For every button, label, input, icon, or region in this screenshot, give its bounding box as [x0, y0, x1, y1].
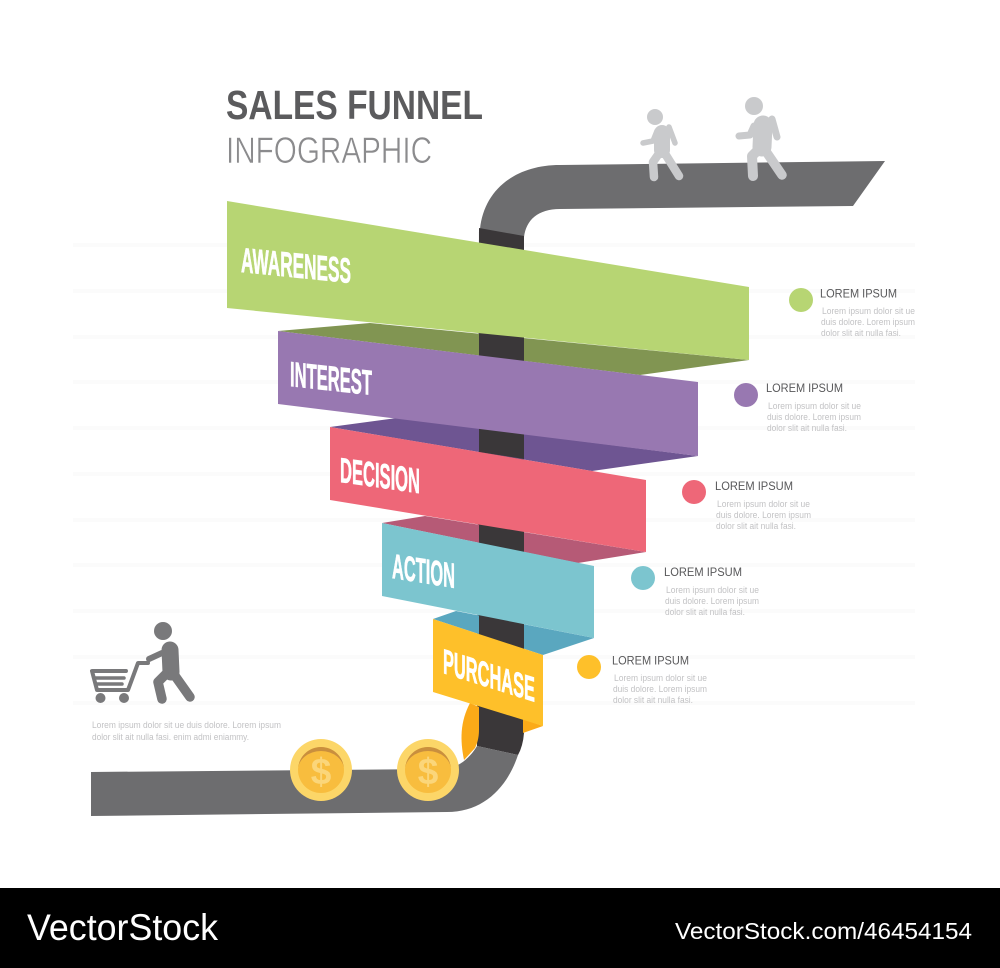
callout: decision: duis dolore. Lorem ipsum — [716, 510, 811, 520]
icon: coin right: $ — [418, 751, 439, 792]
panel: decision ribbon — [330, 427, 646, 552]
strip over awareness shade — [479, 330, 524, 363]
strip over action shade — [479, 615, 524, 650]
panel: action ribbon: ACTION — [392, 547, 455, 596]
panel: decision ribbon: DECISION — [340, 451, 420, 501]
callout: action — [631, 565, 759, 617]
callout: purchase: dolor slit ait nulla fasi. — [613, 695, 693, 705]
strip over interest shade — [479, 425, 524, 459]
panel: interest ribbon — [278, 331, 698, 456]
fold shade: decision — [382, 516, 646, 563]
lower road — [91, 746, 518, 816]
fold shade: purchase — [523, 719, 543, 733]
callout: interest: dolor slit ait nulla fasi. — [767, 423, 847, 433]
callout: action: LOREM IPSUM — [664, 565, 742, 579]
callout: purchase: Lorem ipsum dolor sit ue — [614, 673, 707, 683]
callout: awareness — [789, 286, 915, 338]
title: INFOGRAPHIC — [226, 130, 432, 171]
callout: awareness: dolor slit ait nulla fasi. — [821, 328, 901, 338]
icon: coin left: $ — [311, 751, 332, 792]
callout: interest: LOREM IPSUM — [766, 381, 843, 395]
text block: shopper note: Lorem ipsum dolor sit ue duis dolore. Lorem ipsum — [92, 720, 281, 730]
text block: shopper note — [92, 720, 281, 742]
panel: awareness ribbon: AWARENESS — [241, 241, 351, 291]
panel: purchase ribbon — [433, 619, 543, 726]
fold shade: interest — [330, 418, 698, 471]
footer bar: VectorStock.com/46454154 — [675, 918, 972, 944]
icon: shopper with cart — [92, 622, 190, 703]
callout: purchase: LOREM IPSUM — [612, 654, 689, 668]
callout: awareness: duis dolore. Lorem ipsum — [821, 317, 915, 327]
callout: awareness: LOREM IPSUM — [820, 286, 897, 300]
callout: decision — [682, 479, 811, 531]
icon: small walker — [643, 109, 679, 177]
strip over decision shade — [479, 522, 524, 552]
panel: purchase ribbon: PURCHASE — [443, 642, 535, 710]
footer bar — [0, 888, 1000, 968]
callout: action: Lorem ipsum dolor sit ue — [666, 585, 759, 595]
panel: awareness ribbon — [227, 201, 749, 360]
callout: interest — [734, 381, 861, 433]
callout: action: duis dolore. Lorem ipsum — [665, 596, 759, 606]
callout: decision: dolor slit ait nulla fasi. — [716, 521, 796, 531]
callout: interest: Lorem ipsum dolor sit ue — [768, 401, 861, 411]
callout: action: dolor slit ait nulla fasi. — [665, 607, 745, 617]
title — [226, 82, 483, 171]
callout: awareness: Lorem ipsum dolor sit ue — [822, 306, 915, 316]
callout: decision: Lorem ipsum dolor sit ue — [717, 499, 810, 509]
upper road — [480, 161, 885, 237]
callout: purchase: duis dolore. Lorem ipsum — [613, 684, 707, 694]
title: SALES FUNNEL — [226, 82, 483, 128]
icon: orange leaf — [462, 703, 479, 760]
icon: large walker — [739, 97, 782, 176]
icon: coin right — [397, 739, 459, 801]
panel: action ribbon — [382, 523, 594, 638]
text block: shopper note: dolor slit ait nulla fasi. enim admi eniammy. — [92, 732, 249, 742]
funnel inner dark strip — [477, 228, 524, 755]
callout: interest: duis dolore. Lorem ipsum — [767, 412, 861, 422]
fold shade: awareness — [278, 323, 749, 375]
panel: interest ribbon: INTEREST — [290, 355, 372, 403]
icon: coin left — [290, 739, 352, 801]
callout: purchase — [577, 654, 707, 705]
fold shade: action — [433, 611, 594, 655]
footer bar: VectorStock — [27, 907, 218, 948]
callout: decision: LOREM IPSUM — [715, 479, 793, 493]
